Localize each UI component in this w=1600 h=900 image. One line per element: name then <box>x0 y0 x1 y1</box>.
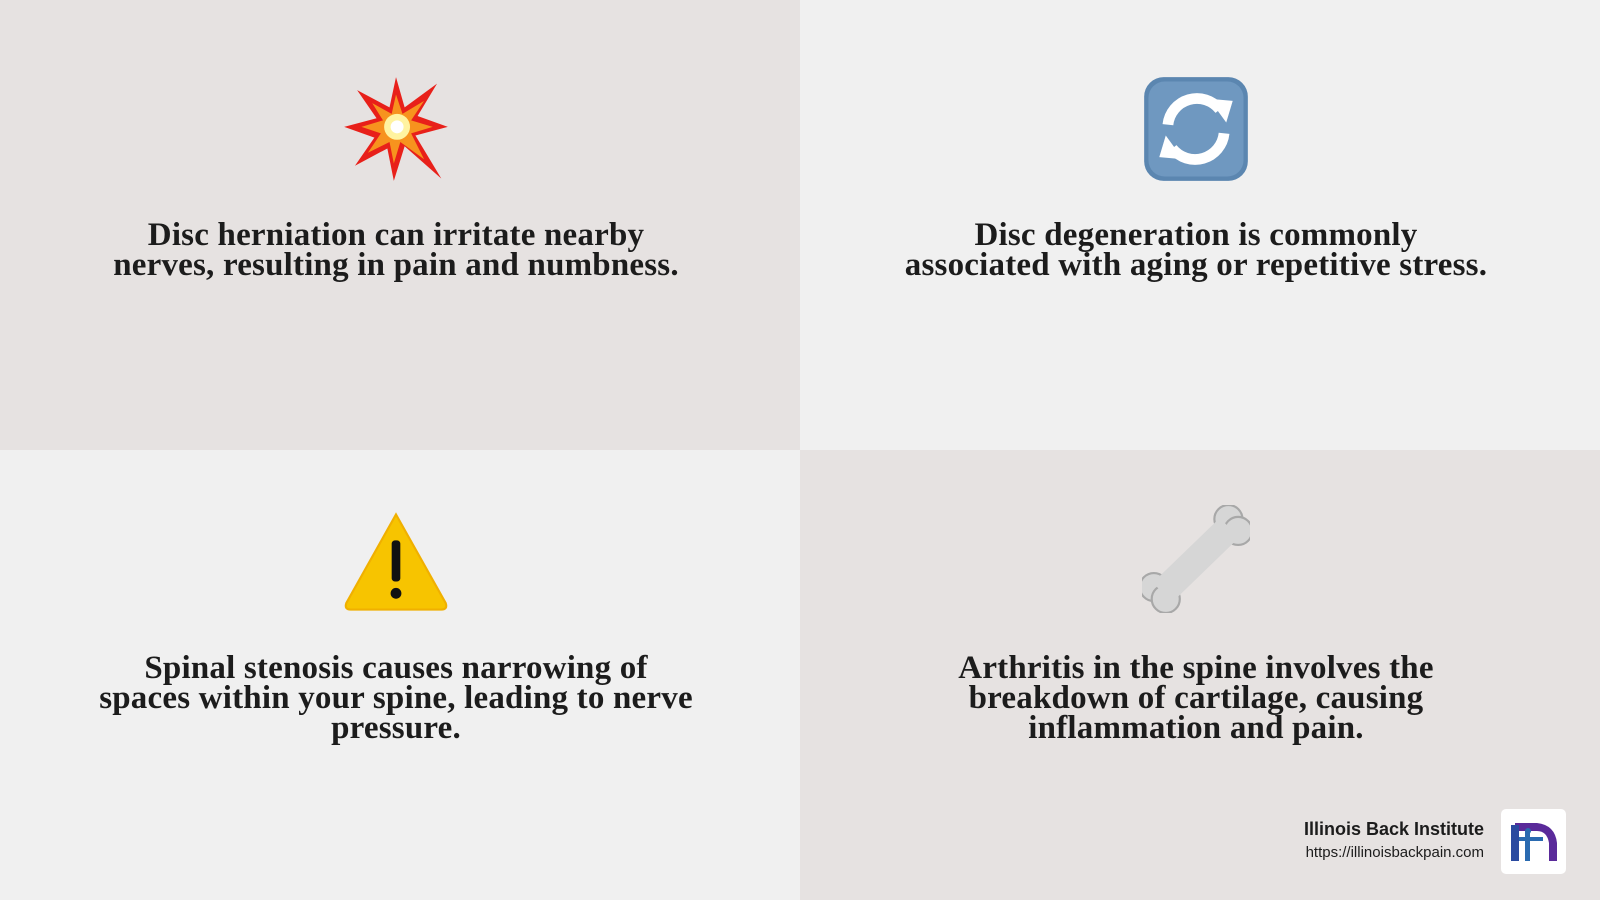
text: herniation: Disc herniation can irritate nearby <box>148 217 644 253</box>
text: arthritis: inflammation and pain. <box>1028 710 1364 746</box>
brand text: Illinois Back Institute <box>1304 819 1484 839</box>
icon: warning <box>344 512 448 611</box>
icon: bone <box>1142 505 1250 613</box>
panel: disc degeneration <box>800 0 1600 450</box>
text: degeneration <box>905 217 1487 283</box>
panel: arthritis <box>800 450 1600 900</box>
panel: spinal stenosis <box>0 450 800 900</box>
panel: disc herniation <box>0 0 800 450</box>
text: stenosis: Spinal stenosis causes narrowing of <box>144 650 648 686</box>
text: stenosis: pressure. <box>331 710 461 746</box>
text: stenosis: spaces within your spine, leading to nerve <box>99 680 693 716</box>
text: arthritis <box>958 650 1434 746</box>
brand text: https://illinoisbackpain.com <box>1306 844 1484 861</box>
text: arthritis: breakdown of cartilage, causing <box>969 680 1423 716</box>
logo <box>1501 809 1566 874</box>
icon: explosion <box>344 77 448 181</box>
text: stenosis <box>99 650 693 746</box>
text: herniation: nerves, resulting in pain and numbness. <box>113 247 679 283</box>
icon: refresh <box>1144 77 1248 181</box>
text: arthritis: Arthritis in the spine involves the <box>958 650 1434 686</box>
text: herniation <box>113 217 679 283</box>
text: degeneration: Disc degeneration is commonly <box>974 217 1418 253</box>
text: degeneration: associated with aging or repetitive stress. <box>905 247 1487 283</box>
brand text <box>1304 819 1484 861</box>
